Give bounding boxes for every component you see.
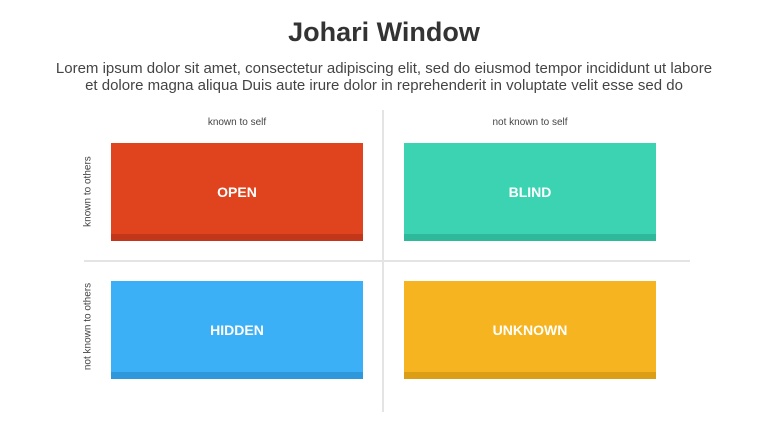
label: not known to others: not known to others: [82, 283, 94, 370]
label: not known to self: not known to self: [492, 117, 568, 128]
panel: hidden: HIDDEN: [210, 322, 264, 338]
panel: unknown: UNKNOWN: [493, 322, 567, 338]
panel: blind: BLIND: [509, 184, 551, 200]
title: Johari Window: [288, 17, 480, 47]
panel: unknown: [404, 281, 656, 379]
subtitle: et dolore magna aliqua Duis aute irure dolor in reprehenderit in voluptate velit esse sed do: [85, 77, 683, 94]
subtitle: Lorem ipsum dolor sit amet, consectetur adipiscing elit, sed do eiusmod tempor incididunt ut labore: [56, 60, 712, 77]
label: known to self: known to self: [208, 117, 266, 128]
panel: open: OPEN: [217, 184, 257, 200]
subtitle: [56, 60, 712, 94]
label: known to others: known to others: [82, 156, 94, 227]
panel: open: [111, 143, 363, 241]
panel: blind: [404, 143, 656, 241]
panel: hidden: [111, 281, 363, 379]
